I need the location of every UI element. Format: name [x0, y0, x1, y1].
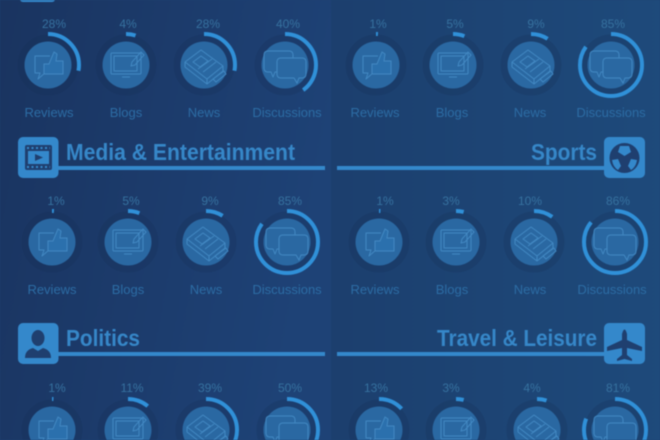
- title: Sports: [531, 139, 597, 165]
- icon: soccer ball: [610, 143, 640, 173]
- gauge: news 39%: 39%: [198, 381, 222, 395]
- gauge: reviews 28%: [17, 17, 79, 120]
- panel: sports: [337, 137, 647, 297]
- gauge: reviews 1%: [21, 381, 83, 440]
- gauge: reviews 13%: 13%: [364, 381, 388, 395]
- gauge: blogs 3%: [425, 381, 487, 440]
- gauge: news 10%: 10%: [518, 194, 542, 208]
- gauge: reviews 13%: [348, 381, 410, 440]
- gauge: blogs 3%: 3%: [442, 381, 460, 395]
- gauge: news 10%: [503, 194, 565, 297]
- panel: top right metrics: [345, 17, 646, 120]
- icon: plane: [607, 330, 642, 361]
- gauge: reviews 1%: 1%: [376, 194, 394, 208]
- gauge: blogs 4%: Blogs: [110, 105, 143, 120]
- gauge: blogs 4%: 4%: [119, 17, 137, 31]
- gauge: discussions 85%: [252, 194, 322, 297]
- gauge: blogs 5%: [422, 17, 484, 120]
- gauge: news 28%: News: [188, 105, 221, 120]
- gauge: reviews 1%: Reviews: [350, 105, 400, 120]
- gauge: discussions 85%: 85%: [601, 17, 625, 31]
- gauge: blogs 3%: [425, 194, 487, 297]
- gauge: reviews 1%: 1%: [48, 381, 66, 395]
- gauge: discussions 85%: Discussions: [576, 105, 646, 120]
- gauge: blogs 5%: 5%: [122, 194, 140, 208]
- gauge: reviews 1%: [345, 17, 407, 120]
- gauge: discussions 85%: 85%: [278, 194, 302, 208]
- gauge: news 9%: [175, 194, 237, 297]
- gauge: reviews 1%: 1%: [369, 17, 387, 31]
- gauge: blogs 11%: 11%: [120, 381, 144, 395]
- gauge: discussions 50%: 50%: [278, 381, 302, 395]
- title: Media & Entertainment: [66, 139, 295, 165]
- gauge: reviews 28%: Reviews: [24, 105, 74, 120]
- gauge: news 39%: [175, 381, 237, 440]
- gauge: news 9%: News: [190, 282, 223, 297]
- gauge: blogs 5%: 5%: [446, 17, 464, 31]
- gauge: blogs 11%: [97, 381, 159, 440]
- panel: media and entertainment: [18, 137, 325, 297]
- gauge: discussions 81%: [584, 381, 646, 440]
- gauge: news 28%: [173, 17, 235, 120]
- gauge: discussions 50%: [256, 381, 318, 440]
- title: Travel & Leisure: [437, 325, 597, 351]
- gauge: reviews 1%: Reviews: [27, 282, 77, 297]
- gauge: news 4%: 4%: [523, 381, 541, 395]
- gauge: blogs 4%: [95, 17, 157, 120]
- heading: travel and leisure: [337, 323, 645, 364]
- gauge: discussions 86%: 86%: [606, 194, 630, 208]
- title: Politics: [66, 325, 140, 351]
- icon: person: [25, 330, 51, 358]
- gauge: news 9%: 9%: [527, 17, 545, 31]
- gauge: news 9%: [500, 17, 562, 120]
- heading: politics: [18, 323, 325, 364]
- gauge: news 9%: News: [514, 105, 547, 120]
- panel: top left metrics: [17, 17, 322, 120]
- gauge: blogs 3%: 3%: [442, 194, 460, 208]
- gauge: reviews 1%: 1%: [47, 194, 65, 208]
- gauge: blogs 5%: [97, 194, 159, 297]
- gauge: reviews 1%: [21, 194, 83, 297]
- gauge: blogs 3%: Blogs: [436, 282, 469, 297]
- gauge: discussions 40%: [252, 17, 322, 120]
- gauge: discussions 85%: [576, 17, 646, 120]
- heading: media and entertainment: [18, 137, 325, 178]
- gauge: news 4%: [506, 381, 568, 440]
- panel: politics: [18, 323, 325, 440]
- gauge: reviews 28%: 28%: [42, 17, 66, 31]
- gauge: news 28%: 28%: [196, 17, 220, 31]
- gauge: reviews 1%: [348, 194, 410, 297]
- gauge: news 10%: News: [514, 282, 547, 297]
- gauge: discussions 86%: [577, 194, 647, 297]
- gauge: blogs 5%: Blogs: [436, 105, 469, 120]
- panel: travel and leisure: [337, 323, 646, 440]
- gauge: reviews 1%: Reviews: [350, 282, 400, 297]
- gauge: discussions 85%: Discussions: [252, 282, 322, 297]
- gauge: news 9%: 9%: [201, 194, 219, 208]
- gauge: discussions 81%: 81%: [606, 381, 630, 395]
- gauge: blogs 5%: Blogs: [112, 282, 145, 297]
- icon: cropped top header tab: [20, 0, 55, 2]
- icon: film strip: [25, 145, 52, 170]
- gauge: discussions 86%: Discussions: [577, 282, 647, 297]
- gauge: discussions 40%: Discussions: [252, 105, 322, 120]
- gauge: discussions 40%: 40%: [276, 17, 300, 31]
- heading: sports: [337, 137, 645, 178]
